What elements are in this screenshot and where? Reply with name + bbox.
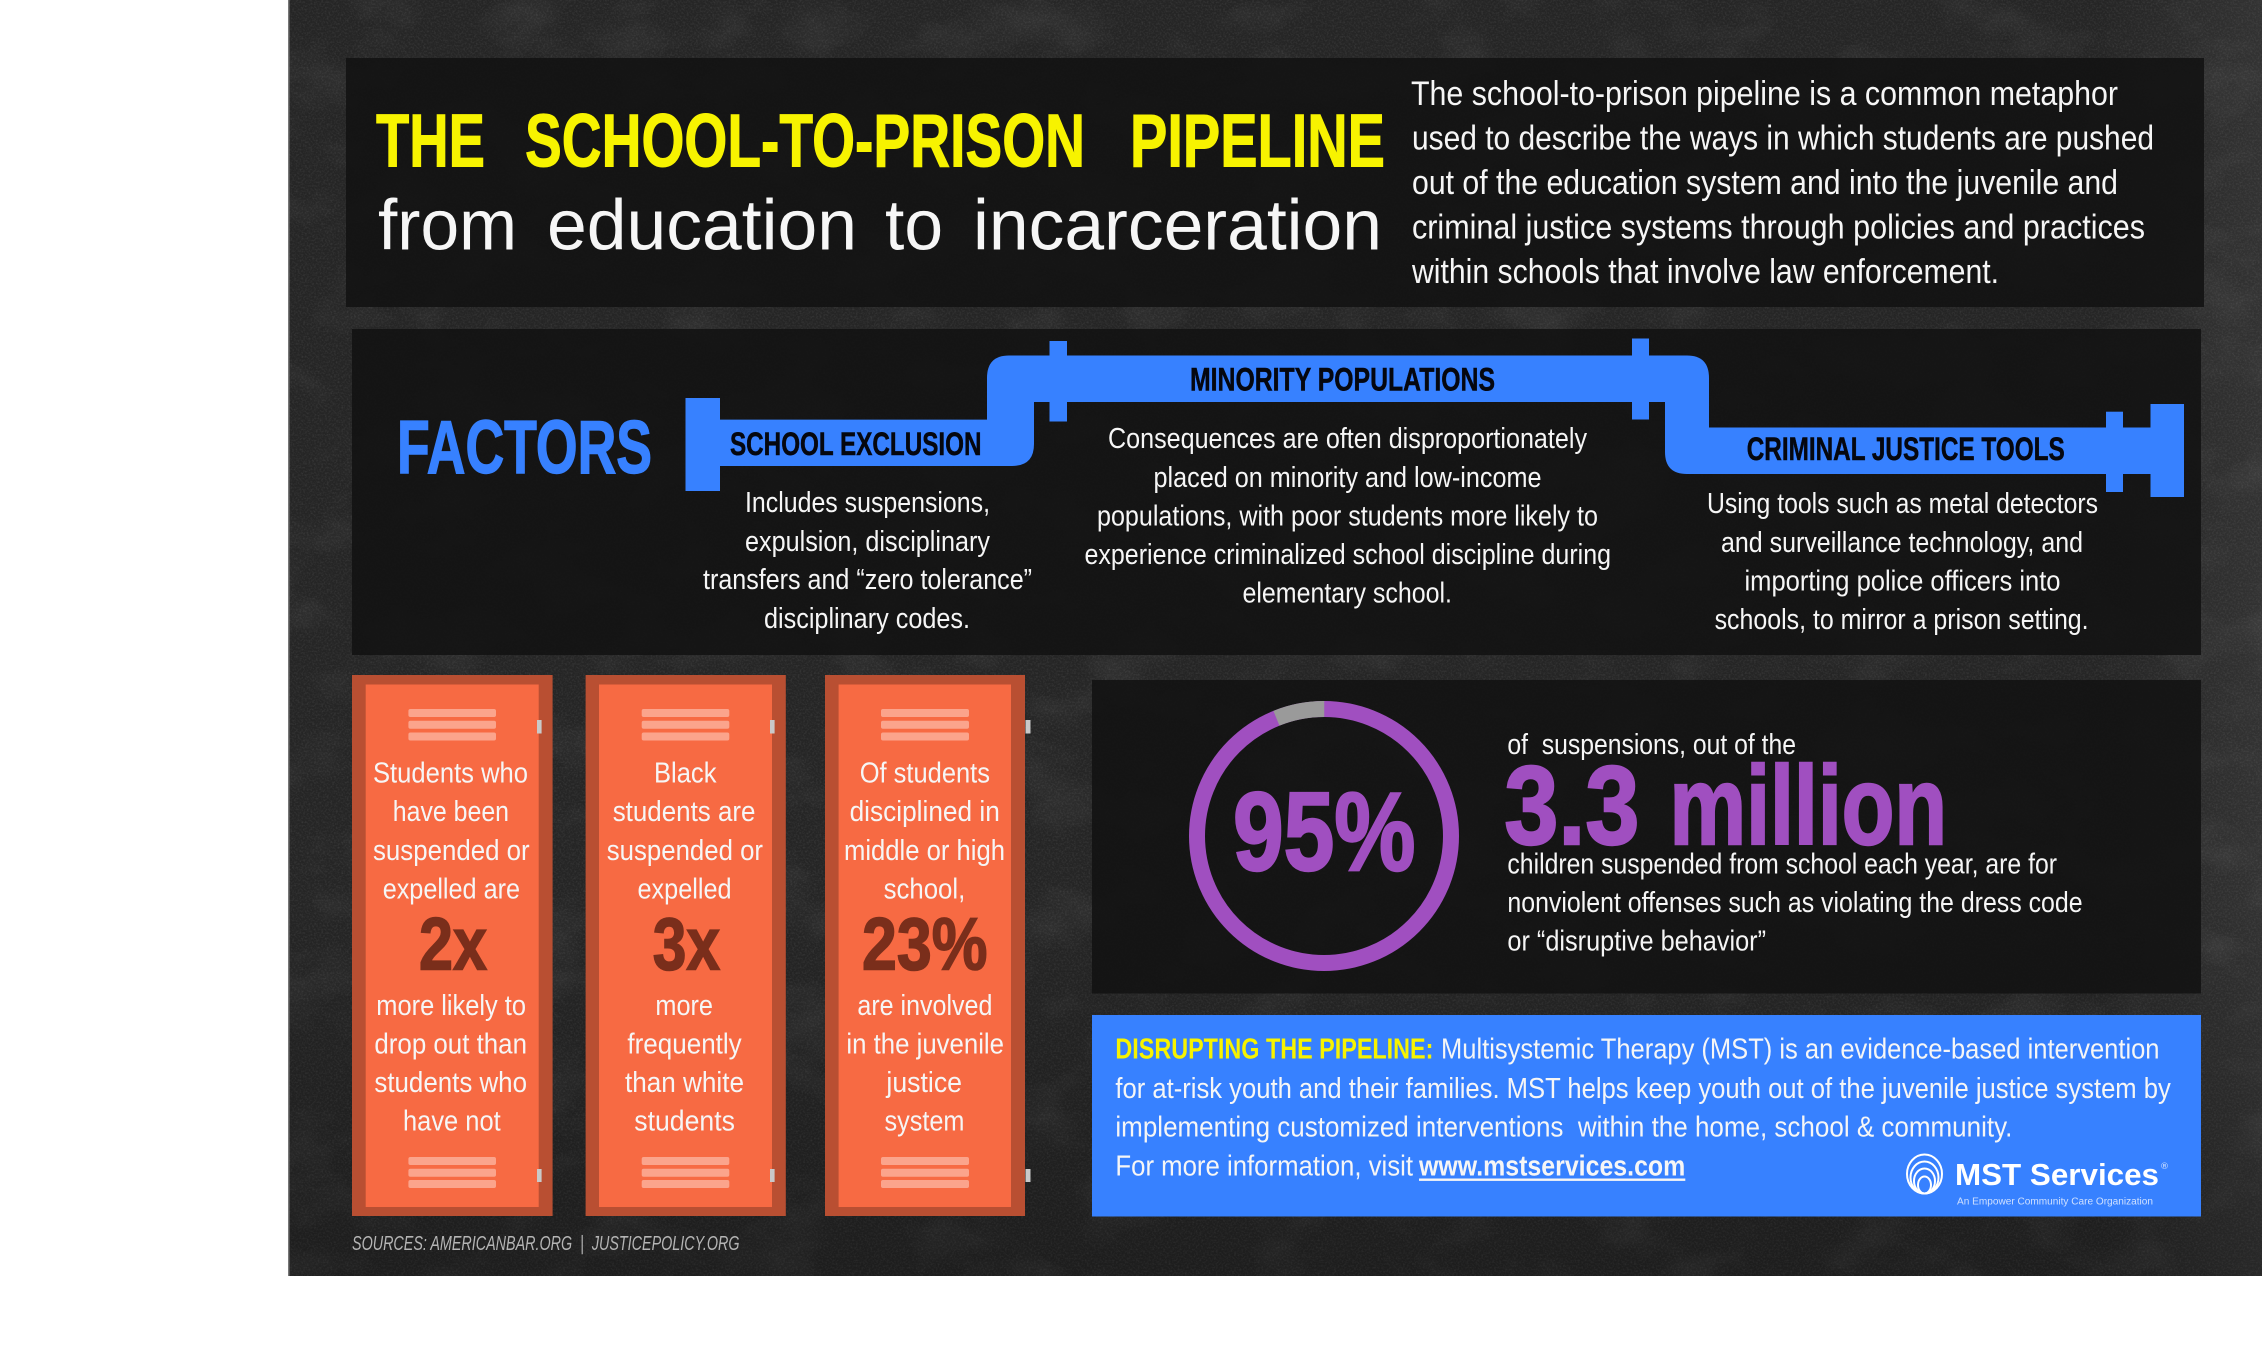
- stat text: nonviolent offenses such as violating the dress code: [1507, 887, 2083, 919]
- subtitle: to: [885, 186, 943, 266]
- logo: MST Services: MST Services: [1955, 1157, 2159, 1192]
- locker text: Of students: [860, 758, 990, 790]
- factor: school exclusion: [703, 426, 1032, 635]
- factor: school exclusion: disciplinary codes.: [764, 603, 970, 635]
- factor: criminal justice tools: importing police officers into: [1744, 566, 2060, 598]
- factor: criminal justice tools: schools, to mirror a prison setting.: [1715, 604, 2089, 636]
- vents top: [642, 709, 729, 740]
- vents top: [408, 709, 496, 740]
- subtitle: education: [547, 186, 857, 266]
- stat text: of suspensions, out of the: [1507, 729, 1796, 761]
- stat text: 3.3: [1504, 744, 1639, 868]
- factor: school exclusion: expulsion, disciplinary: [745, 526, 990, 558]
- locker text: middle or high: [844, 835, 1005, 867]
- factor: minority populations: experience criminalized school discipline during: [1084, 539, 1611, 571]
- locker text: drop out than: [374, 1028, 527, 1060]
- callout text: DISRUPTING THE PIPELINE:: [1115, 1034, 1433, 1066]
- locker text: disciplined in: [850, 796, 1000, 828]
- locker text: [373, 758, 530, 1138]
- locker text: expelled are: [383, 873, 520, 905]
- factor: criminal justice tools: CRIMINAL JUSTICE TOOLS: [1747, 431, 2065, 467]
- intro paragraph: within schools that involve law enforcement.: [1411, 253, 1999, 291]
- subtitle: [378, 186, 1382, 266]
- locker text: students are: [613, 796, 756, 828]
- stat text: children suspended from school each year, are for: [1507, 849, 2057, 881]
- stat text: or “disruptive behavior”: [1507, 926, 1766, 958]
- locker text: justice: [885, 1067, 962, 1099]
- factor: school exclusion: Includes suspensions,: [745, 487, 990, 519]
- locker text: have been: [393, 796, 509, 828]
- intro paragraph: criminal justice systems through policies and practices: [1412, 208, 2145, 246]
- intro paragraph: used to describe the ways in which students are pushed: [1412, 120, 2154, 158]
- factor: minority populations: [1084, 362, 1611, 610]
- panel: title header: [346, 58, 2204, 307]
- locker text: suspended or: [373, 835, 530, 867]
- locker 1: [352, 675, 553, 1216]
- locker text: more likely to: [376, 990, 526, 1022]
- title: PIPELINE: [1130, 98, 1385, 182]
- locker 2: [586, 675, 786, 1216]
- locker text: in the juvenile: [846, 1028, 1004, 1060]
- locker text: than white: [625, 1067, 744, 1099]
- factor: school exclusion: SCHOOL EXCLUSION: [730, 426, 982, 462]
- factor: minority populations: Consequences are often disproportionately: [1108, 423, 1587, 455]
- donut chart: [1159, 671, 1489, 1001]
- intro paragraph: [1411, 75, 2154, 291]
- panel: disrupting the pipeline: [1092, 1015, 2201, 1216]
- locker text: Black: [654, 758, 717, 790]
- callout text: For more information, visit: [1115, 1150, 1413, 1182]
- factor: criminal justice tools: and surveillance technology, and: [1721, 527, 2083, 559]
- locker 3: [825, 675, 1030, 1216]
- 95%: 95%: [1233, 770, 1415, 894]
- locker text: [607, 758, 763, 1138]
- factors heading: FACTORS: [397, 405, 652, 489]
- factor: minority populations: populations, with poor students more likely to: [1097, 501, 1598, 533]
- hinges: [1026, 720, 1030, 1182]
- factor: criminal justice tools: Using tools such as metal detectors: [1707, 488, 2098, 520]
- factor: minority populations: MINORITY POPULATIONS: [1190, 362, 1495, 398]
- stat text: [1504, 729, 2083, 958]
- subtitle: from: [378, 186, 517, 266]
- panel: 95 percent statistic: [1092, 671, 2201, 1001]
- vents bottom: [408, 1157, 496, 1188]
- locker text: [844, 758, 1005, 1138]
- vents bottom: [642, 1157, 729, 1188]
- hinges: [770, 720, 775, 1182]
- title: THE: [376, 98, 485, 182]
- locker text: students who: [374, 1067, 527, 1099]
- locker text: 2x: [419, 903, 487, 986]
- logo: MST Services: An Empower Community Care Organization: [1957, 1197, 2153, 1208]
- intro paragraph: out of the education system and into the juvenile and: [1412, 164, 2118, 202]
- sources: SOURCES: AMERICANBAR.ORG | JUSTICEPOLICY.ORG: [352, 1233, 740, 1255]
- callout text: www.mstservices.com: [1418, 1150, 1685, 1182]
- locker text: school,: [884, 873, 965, 905]
- locker text: frequently: [627, 1028, 742, 1060]
- callout text: implementing customized interventions within the home, school & community.: [1115, 1112, 2012, 1144]
- stat text: million: [1670, 744, 1947, 868]
- locker text: expelled: [638, 873, 732, 905]
- title: SCHOOL-TO-PRISON: [525, 98, 1085, 182]
- locker text: suspended or: [607, 835, 763, 867]
- vents top: [881, 709, 969, 740]
- factor: minority populations: elementary school.: [1242, 578, 1452, 610]
- hinges: [537, 720, 542, 1182]
- logo: MST Services: ®: [2160, 1162, 2169, 1172]
- factor: school exclusion: transfers and “zero tolerance”: [703, 564, 1032, 596]
- subtitle: incarceration: [973, 186, 1382, 266]
- locker text: 3x: [653, 903, 720, 986]
- intro paragraph: The school-to-prison pipeline is a common metaphor: [1411, 75, 2118, 113]
- panel: factors: [352, 329, 2201, 655]
- locker text: are involved: [857, 990, 992, 1022]
- vents bottom: [881, 1157, 969, 1188]
- factor: criminal justice tools: [1707, 431, 2098, 636]
- locker text: system: [884, 1106, 964, 1138]
- locker text: more: [655, 990, 713, 1022]
- factor: minority populations: placed on minority and low-income: [1154, 462, 1542, 494]
- logo: MST Services: [1907, 1154, 2169, 1208]
- callout text: [1115, 1034, 2171, 1182]
- locker text: Students who: [373, 758, 528, 790]
- locker text: have not: [403, 1106, 501, 1138]
- locker text: students: [634, 1106, 735, 1138]
- locker text: 23%: [862, 903, 987, 986]
- callout text: Multisystemic Therapy (MST) is an evidence-based intervention: [1441, 1034, 2160, 1066]
- pipeline graphic: [686, 338, 2184, 497]
